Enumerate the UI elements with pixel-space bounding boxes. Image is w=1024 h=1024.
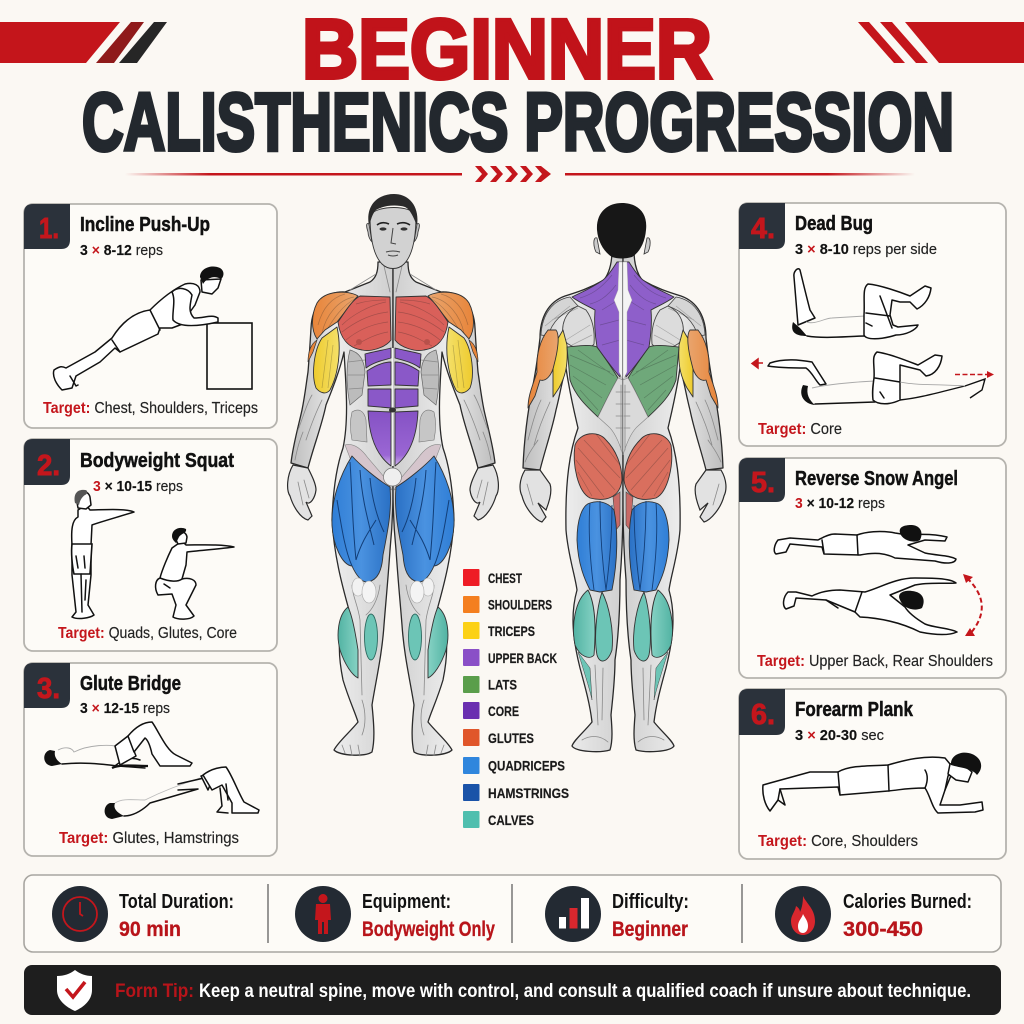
legend: chest xyxy=(463,569,522,586)
legend: shoulders xyxy=(463,596,552,613)
stat: calories burned: Calories Burned: xyxy=(843,891,972,913)
number badge 5: 5. xyxy=(751,467,775,499)
title divider with chevrons xyxy=(125,166,915,182)
motion arc arrow xyxy=(967,578,982,634)
back anatomy figure xyxy=(520,203,726,752)
number badge 3: 3. xyxy=(37,673,60,705)
panel 1: incline push-up xyxy=(24,204,277,428)
front anatomy figure xyxy=(288,194,498,756)
panel 6: forearm plank xyxy=(739,689,1006,859)
legend: upper back: UPPER BACK xyxy=(488,650,557,666)
header banner: left stripes xyxy=(0,22,167,63)
number badge 5 xyxy=(739,458,785,502)
target muscles: Target: Upper Back, Rear Shoulders xyxy=(757,653,993,670)
header banner: right stripes xyxy=(858,22,1024,63)
legend: triceps: TRICEPS xyxy=(488,623,535,639)
number badge 1: 1. xyxy=(39,213,59,245)
sets and reps: 3 × 10-15 reps xyxy=(93,478,183,495)
number badge 3 xyxy=(24,663,70,708)
panel 5: reverse snow angel xyxy=(739,458,1006,678)
stat: equipment: Bodyweight Only xyxy=(362,918,495,941)
stat: equipment xyxy=(295,886,495,942)
motion arrow left xyxy=(752,359,763,368)
front body muscles xyxy=(288,262,498,756)
back head xyxy=(594,203,650,258)
exercise name: Forearm Plank xyxy=(795,699,914,721)
number badge 4 xyxy=(739,203,785,249)
number badge 4: 4. xyxy=(751,213,775,245)
stat: difficulty: Difficulty: xyxy=(612,891,689,913)
stat: difficulty xyxy=(545,886,689,942)
panel 2: bodyweight squat xyxy=(24,439,277,651)
arrowhead xyxy=(987,371,994,378)
summary stats bar xyxy=(24,875,1001,952)
panel 3: glute bridge xyxy=(24,663,277,856)
title line 1: BEGINNER xyxy=(302,2,712,96)
legend: quadriceps: QUADRICEPS xyxy=(488,758,565,774)
legend: hamstrings xyxy=(463,784,569,801)
exercise name: Reverse Snow Angel xyxy=(795,468,958,490)
target muscles: Target: Core, Shoulders xyxy=(758,833,918,850)
target muscles: Target: Chest, Shoulders, Triceps xyxy=(43,400,258,417)
form tip bar xyxy=(24,965,1001,1015)
legend: core: CORE xyxy=(488,703,519,719)
illustration: incline push-up xyxy=(53,266,252,390)
exercise name: Bodyweight Squat xyxy=(80,450,234,472)
sets and reps: 3 × 20-30 sec xyxy=(795,727,884,744)
sets and reps: 3 × 10-12 reps xyxy=(795,495,885,512)
sets and reps: 3 × 12-15 reps xyxy=(80,700,170,717)
abs centre line and navel xyxy=(389,348,396,466)
illustration: forearm plank xyxy=(763,753,983,813)
legend: calves: CALVES xyxy=(488,812,534,828)
stat: calories burned xyxy=(775,886,972,942)
front head xyxy=(367,194,419,268)
legend: calves xyxy=(463,811,534,828)
legend: hamstrings: HAMSTRINGS xyxy=(488,785,569,801)
muscle colour legend xyxy=(463,569,569,828)
exercise name: Incline Push-Up xyxy=(80,214,210,236)
groin xyxy=(384,468,402,486)
exercise name: Glute Bridge xyxy=(80,673,181,695)
number badge 2 xyxy=(24,439,70,485)
motion arrow right xyxy=(955,374,988,376)
target muscles: Target: Quads, Glutes, Core xyxy=(58,625,237,642)
illustration: glute bridge positions xyxy=(44,722,259,819)
number badge 2: 2. xyxy=(37,450,60,482)
legend: lats xyxy=(463,676,517,693)
sets and reps: 3 × 8-12 reps xyxy=(80,242,163,259)
number badge 6 xyxy=(739,689,785,735)
legend: triceps xyxy=(463,622,535,639)
target muscles: Target: Glutes, Hamstrings xyxy=(59,830,239,847)
icon: shield with check xyxy=(57,970,92,1011)
legend: glutes: GLUTES xyxy=(488,730,534,746)
legend: shoulders: SHOULDERS xyxy=(488,596,552,612)
number badge 1 xyxy=(24,204,70,249)
legend: chest: CHEST xyxy=(488,570,522,586)
back body muscles xyxy=(520,250,726,752)
legend: core xyxy=(463,702,519,719)
stat: total duration: Total Duration: xyxy=(119,891,234,913)
panel 4: dead bug xyxy=(739,203,1006,446)
illustration: squat figures xyxy=(72,490,234,619)
legend: glutes xyxy=(463,729,534,746)
legend: upper back xyxy=(463,649,557,666)
stat: equipment: Equipment: xyxy=(362,891,451,913)
illustration: dead bug positions xyxy=(752,269,988,405)
legend: lats: LATS xyxy=(488,676,517,692)
stat: calories burned: 300-450 xyxy=(843,918,923,941)
stat: total duration xyxy=(52,886,234,942)
target muscles: Target: Core xyxy=(758,421,842,438)
legend: quadriceps xyxy=(463,757,565,774)
sets and reps: 3 × 8-10 reps per side xyxy=(795,241,937,258)
stat: difficulty: Beginner xyxy=(612,918,688,941)
tip label: Form Tip: xyxy=(115,981,194,1002)
number badge 6: 6. xyxy=(751,699,775,731)
illustration: reverse snow angel positions xyxy=(774,525,982,636)
exercise name: Dead Bug xyxy=(795,213,873,235)
stat: total duration: 90 min xyxy=(119,918,181,941)
